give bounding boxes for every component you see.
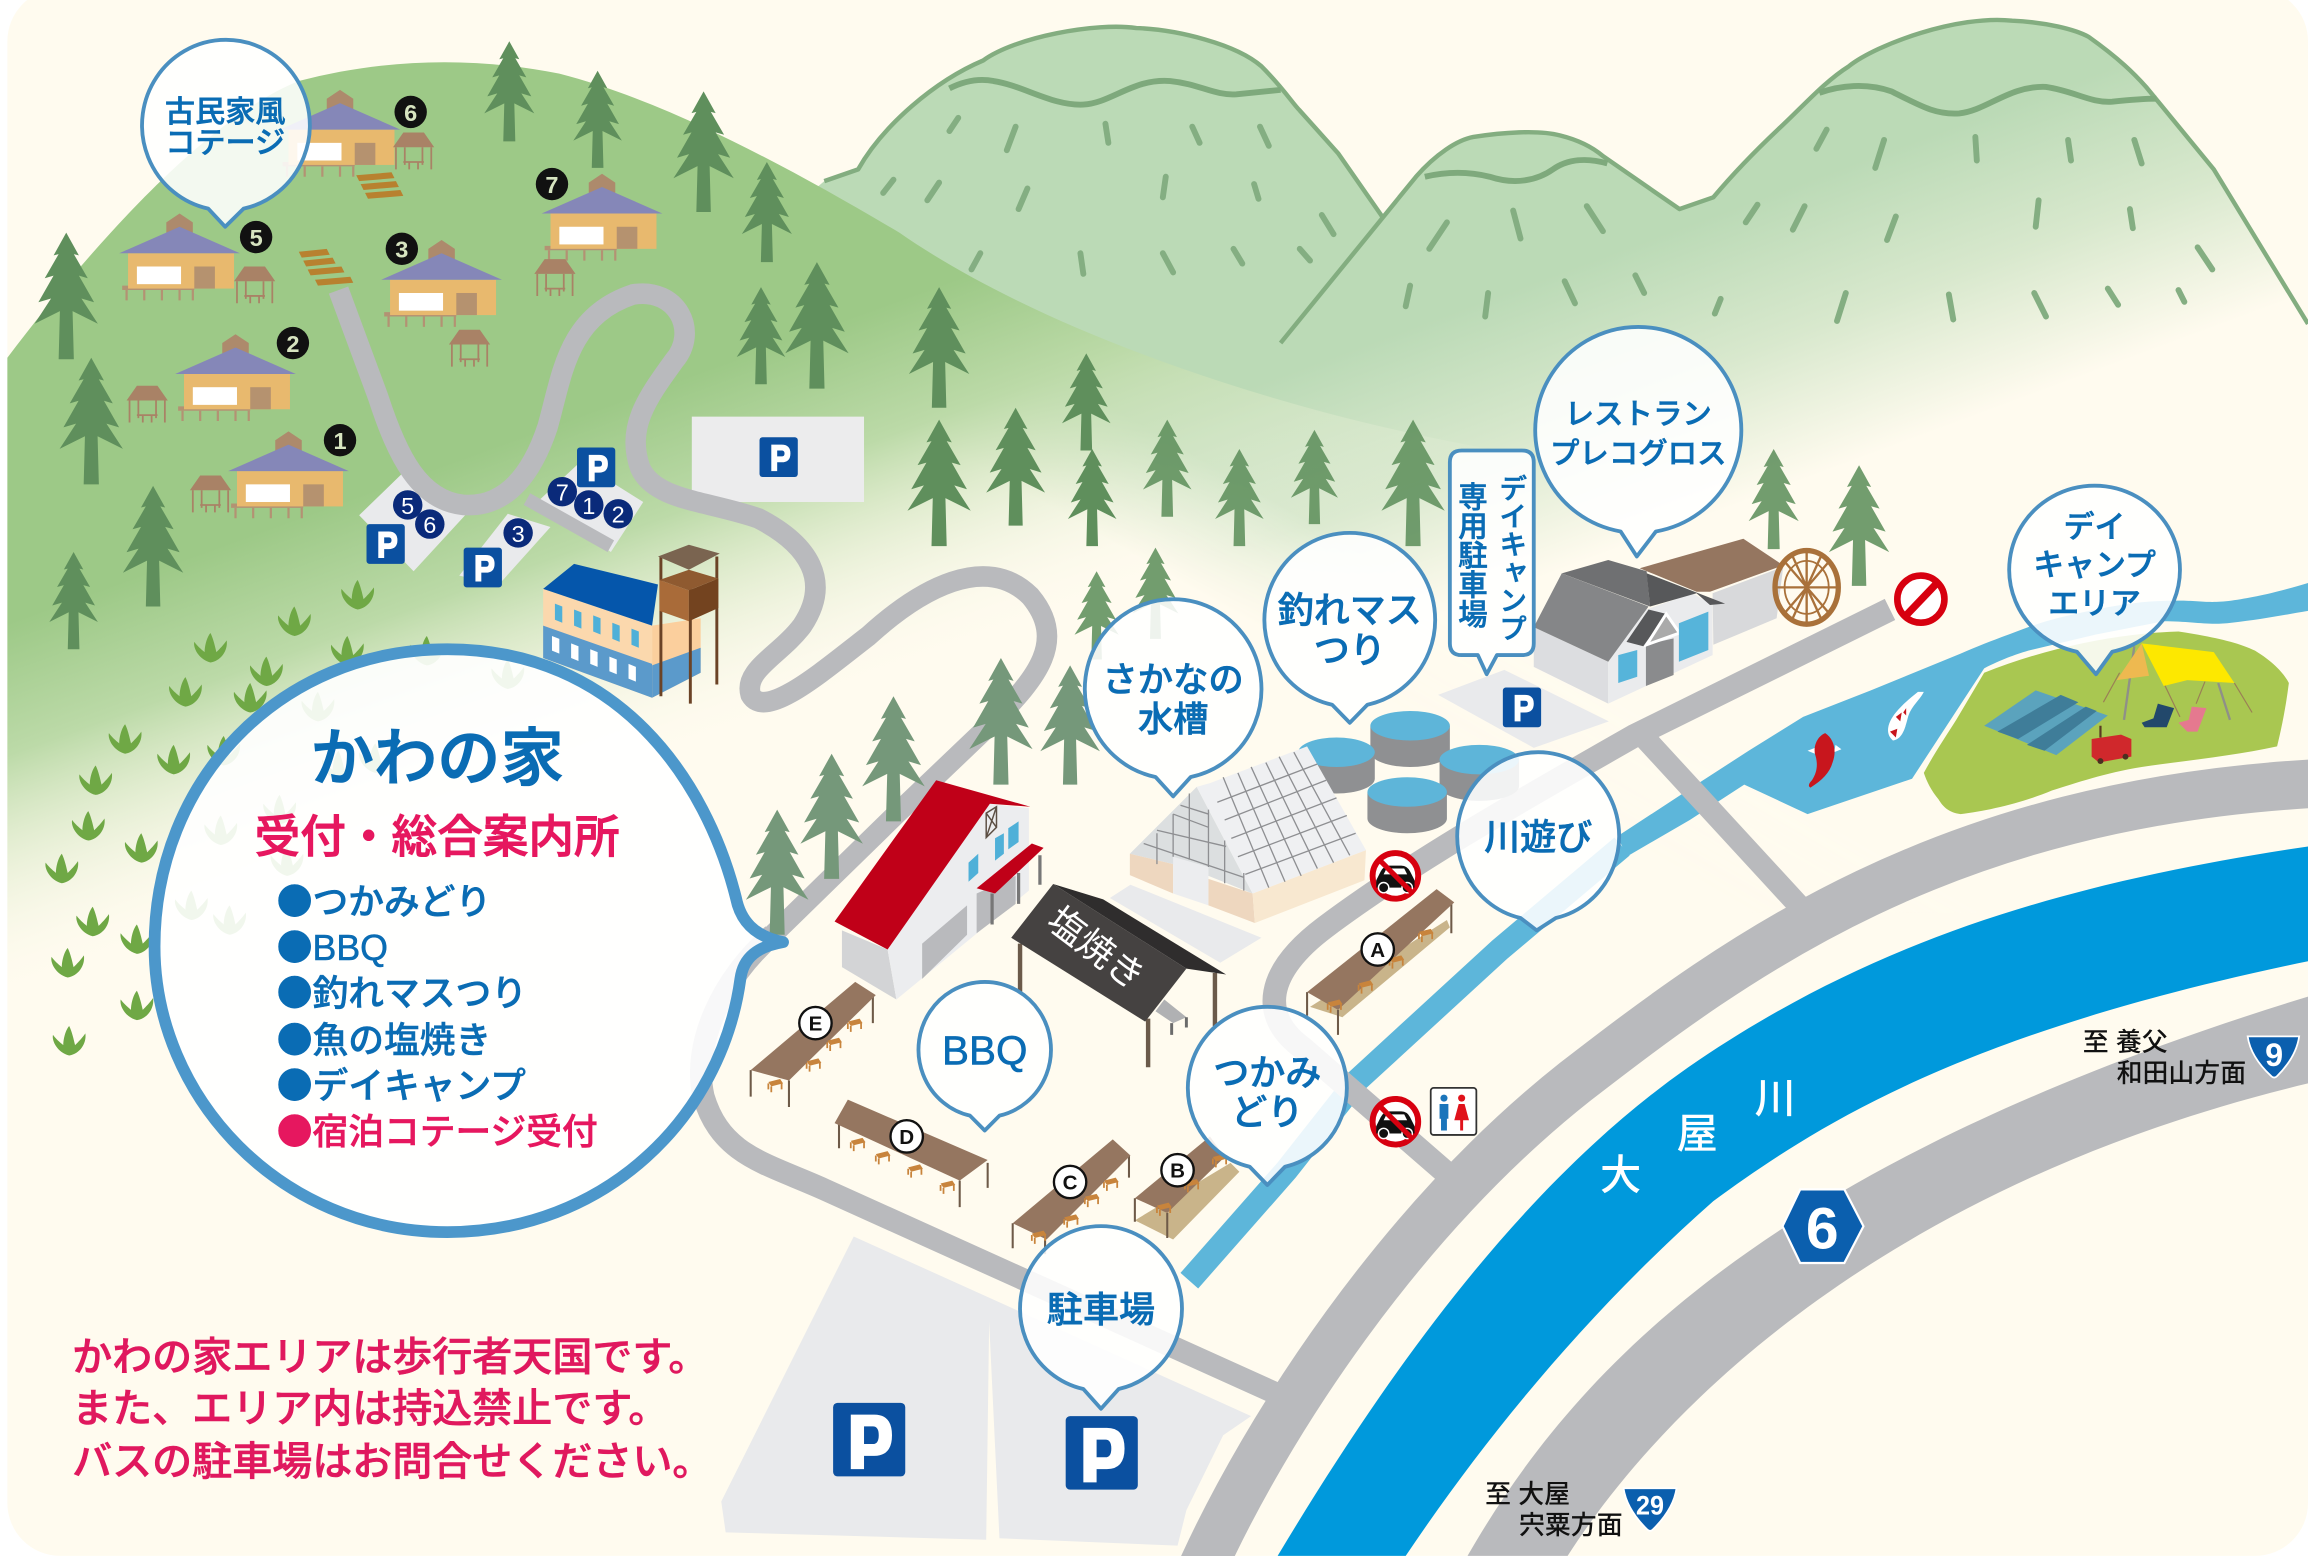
cottage 5 [119, 214, 275, 303]
main road [1201, 783, 2308, 1556]
cottage number badges: 3 [395, 237, 408, 263]
picnic shelter E [751, 982, 876, 1107]
main callout: Kawanoie: ●釣れマスつり [277, 965, 527, 1016]
main callout: Kawanoie: ●デイキャンプ [277, 1058, 526, 1109]
cottage number badges: 5 [250, 225, 263, 251]
river name: 川 [1755, 1076, 1796, 1122]
note text: バスの駐車場はお問合せください。 [72, 1440, 712, 1484]
direction label Yabu: 和田山方面 [2117, 1059, 2246, 1088]
callout: fish tanks: さかなの [1103, 661, 1244, 700]
forest hill [7, 62, 1914, 1030]
picnic shelter C [1013, 1139, 1130, 1254]
callout: day camp area: キャンプ [2033, 548, 2156, 583]
callout: day camp area: エリア [2048, 586, 2141, 621]
main callout: Kawanoie: かわの家 [311, 724, 564, 794]
cottage number badges: 7 [545, 172, 559, 198]
main callout: Kawanoie: ●魚の塩焼き [277, 1013, 491, 1064]
picnic shelter D [835, 1100, 988, 1207]
cottage number badges [240, 96, 568, 456]
main building with watchtower [543, 545, 720, 704]
small parking signs with cottage numbers: 1 [582, 493, 595, 519]
big parking sign right [1066, 1416, 1138, 1490]
trees on the hillside [35, 41, 1116, 649]
restaurant with water wheel [1534, 539, 1838, 704]
route 6 sign: 6 [1806, 1196, 1839, 1261]
small parking signs with cottage numbers: 3 [512, 521, 525, 547]
direction label Oya [1485, 1480, 1623, 1540]
callout: restaurant: プレコグロス [1550, 438, 1727, 471]
small parking signs with cottage numbers: 5 [401, 493, 414, 519]
callout: day camp parking: 専用駐車場 [1454, 481, 1488, 629]
cottage 7 [534, 174, 662, 296]
no-car sign upper [1373, 853, 1418, 899]
callout: restaurant [1535, 327, 1741, 556]
mountains [818, 18, 2308, 586]
direction label Yabu [2083, 1028, 2246, 1088]
trees near the restaurant [1075, 420, 1889, 660]
callout: old-style cottage: 古民家風 [165, 95, 286, 129]
small parking signs with cottage numbers: 6 [423, 512, 436, 538]
route 29 sign [1624, 1488, 1677, 1531]
big parking sign left [833, 1403, 905, 1476]
greenhouse aquarium [1130, 746, 1366, 923]
river name: 大 [1600, 1152, 1641, 1198]
route 6 sign [1783, 1189, 1863, 1263]
toilet sign [1431, 1088, 1476, 1135]
red-roofed barn [835, 780, 1044, 1000]
main callout: Kawanoie: 受付・総合案内所 [255, 811, 620, 862]
main callout: Kawanoie: ●宿泊コテージ受付 [277, 1104, 598, 1155]
picnic shelter B [1135, 1136, 1239, 1239]
river name [1600, 1076, 1796, 1198]
callout: day camp parking [1450, 450, 1534, 674]
note text: また、エリア内は持込禁止です。 [72, 1387, 668, 1431]
callout: river play [1457, 752, 1619, 930]
small parking signs with cottage numbers: 2 [612, 502, 625, 528]
route 9 sign: 9 [2265, 1037, 2283, 1073]
grass tufts [45, 580, 524, 1055]
callout: day camp area: デイ [2064, 509, 2125, 544]
callout: old-style cottage [142, 40, 310, 227]
trees beside the barn [746, 658, 1100, 935]
river name: 屋 [1677, 1111, 1718, 1157]
callout: parking [1020, 1226, 1182, 1409]
callout: BBQ: BBQ [942, 1027, 1027, 1073]
parking lots [359, 417, 1609, 1546]
cottage 3 [381, 240, 502, 367]
wooden steps [299, 172, 403, 286]
day camp island [1924, 632, 2289, 814]
koi fish [1808, 692, 1924, 788]
picnic shelter A [1307, 889, 1454, 1035]
direction label Oya: 至 大屋 [1485, 1480, 1570, 1509]
callout: trout fishing: つり [1314, 629, 1386, 670]
cottage number badges: 1 [333, 428, 347, 454]
callout: fish tanks [1085, 599, 1261, 796]
direction label Oya: 宍粟方面 [1519, 1511, 1623, 1540]
note text [72, 1335, 712, 1484]
picnic shelter D: D [899, 1126, 914, 1149]
cottage 1 [190, 431, 349, 518]
stream and koi pond [1189, 583, 2308, 1281]
callout: BBQ [918, 982, 1051, 1131]
callout: day camp parking: デイキャンプ [1496, 474, 1527, 642]
picnic shelter A: A [1370, 939, 1385, 962]
callout: parking: 駐車場 [1047, 1289, 1155, 1330]
callout: catch by hand: どり [1231, 1092, 1303, 1133]
callout: river play: 川遊び [1484, 816, 1592, 857]
callout: day camp area [2009, 486, 2180, 674]
no-car sign lower [1373, 1099, 1418, 1145]
fish tanks [1298, 711, 1519, 833]
main callout: Kawanoie: ●BBQ [277, 920, 388, 971]
cottage number badges: 2 [286, 331, 299, 357]
cottage 2 [127, 334, 296, 423]
national road band [1468, 997, 2308, 1556]
main callout: Kawanoie: ●つかみどり [277, 874, 491, 925]
salt-grill shelter: 塩焼き [1040, 899, 1153, 998]
picnic shelter E: E [809, 1012, 822, 1035]
callout: old-style cottage: コテージ [165, 127, 285, 160]
direction label Yabu: 至 養父 [2083, 1028, 2168, 1057]
salt-grill shelter [1011, 884, 1226, 1067]
small parking signs with cottage numbers [367, 437, 798, 587]
cottage 6 [280, 90, 434, 177]
no-entry sign [1897, 576, 1944, 623]
callout: fish tanks: 水槽 [1138, 701, 1208, 740]
picnic shelter C: C [1063, 1171, 1078, 1194]
callout: catch by hand [1188, 1007, 1347, 1185]
callout: trout fishing [1264, 533, 1435, 723]
roads [339, 290, 1890, 1395]
note text: かわの家エリアは歩行者天国です。 [72, 1335, 708, 1379]
day camp parking sign [1503, 687, 1541, 727]
callout: catch by hand: つかみ [1213, 1052, 1321, 1093]
main callout: Kawanoie [155, 649, 783, 1232]
callout: trout fishing: 釣れマス [1278, 590, 1422, 631]
cottage number badges: 6 [404, 100, 417, 126]
small parking signs with cottage numbers: 7 [556, 480, 569, 506]
callout: restaurant: レストラン [1565, 398, 1712, 431]
river Oya [1278, 846, 2308, 1556]
route 9 sign [2248, 1036, 2299, 1078]
route 29 sign: 29 [1636, 1491, 1664, 1521]
picnic shelter B: B [1170, 1160, 1185, 1183]
